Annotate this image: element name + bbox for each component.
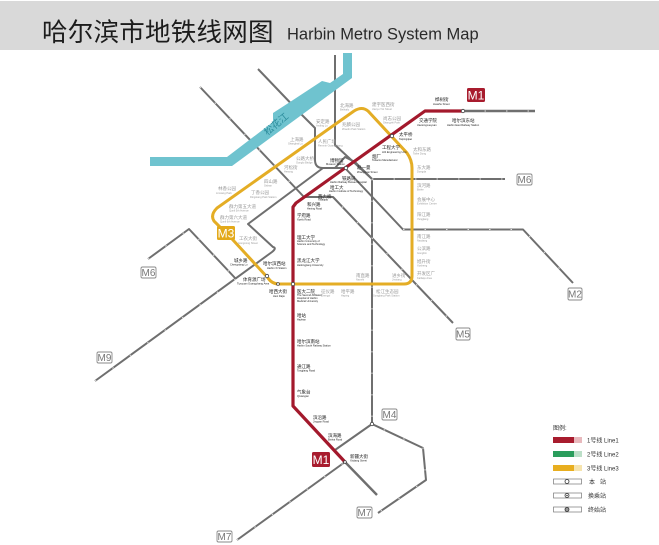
line M4 branch	[335, 424, 372, 450]
station: 旭升街	[417, 258, 431, 265]
station: Binhai Road	[328, 438, 343, 442]
station: 哈工大	[330, 184, 344, 191]
station	[417, 182, 431, 192]
line badge M9: M9	[98, 353, 112, 364]
station: 开发区广	[417, 270, 435, 277]
station: Taipingqiao	[399, 137, 413, 141]
river label: 松花江	[262, 110, 292, 138]
station: Nanzhi	[356, 278, 364, 282]
river: Songhua River	[150, 53, 352, 166]
station: Qixiangtai	[297, 394, 309, 398]
station: Harbin University of	[297, 239, 320, 243]
legend: station: 站	[600, 478, 606, 486]
station	[296, 155, 314, 164]
station	[238, 235, 258, 245]
station: Hazhan	[297, 318, 306, 322]
station: Qunli 6th Avenue	[220, 220, 240, 224]
line badge M2: M2	[568, 290, 582, 300]
station: 松江生态园	[376, 288, 399, 295]
station: 铁路局	[342, 175, 356, 182]
line badge M3: M3	[218, 226, 235, 240]
line 3 yellow	[213, 108, 412, 284]
station	[413, 146, 431, 156]
station: 丁香公园	[251, 189, 269, 196]
station: 公路大桥	[296, 155, 314, 162]
station: 工农大街	[239, 235, 257, 242]
station	[329, 184, 364, 193]
station: 理工大学	[297, 234, 315, 241]
station: 哈尔滨南站	[297, 338, 320, 345]
station	[330, 175, 367, 184]
line 3 station labels	[216, 101, 437, 298]
station: Tongjiang Road	[297, 368, 316, 372]
station: 河松街	[284, 164, 298, 171]
station: 西大桥	[318, 193, 332, 200]
station: Linxiang Park	[216, 191, 232, 195]
station: Qunli 5th Avenue	[229, 208, 249, 212]
station: Science and Technology	[297, 242, 326, 246]
station	[297, 363, 316, 372]
station	[417, 211, 431, 221]
station: 尚志公园	[383, 115, 401, 122]
line badge M1 north: M1	[468, 88, 485, 102]
station: Dongda	[417, 170, 427, 174]
station: 哈站	[297, 312, 306, 319]
station	[318, 138, 343, 148]
station	[297, 338, 331, 348]
line M9	[95, 168, 323, 381]
station	[316, 118, 330, 128]
station: 学府路	[297, 212, 311, 219]
station: Exhibition Center	[417, 202, 437, 206]
station	[237, 276, 270, 286]
legend: line 3: 3号线 Line3	[587, 464, 619, 472]
station: Harbin Institute of Technology	[329, 189, 364, 193]
station: Jingyan Road	[313, 420, 329, 424]
station	[357, 164, 378, 174]
station: Jinxiang	[392, 278, 402, 282]
station: Renmin Guangchang	[318, 144, 343, 148]
station: Chengxiang Lu	[230, 262, 248, 266]
station	[417, 117, 437, 127]
station: 四山路	[264, 178, 278, 185]
station: 南江路	[417, 233, 431, 240]
station: 医大二院	[297, 288, 315, 295]
station: 哈尔滨东站	[452, 117, 475, 124]
station: 会展中心	[417, 196, 435, 203]
station: 城乡路	[234, 257, 248, 264]
station: 和兴路	[307, 201, 321, 208]
station	[417, 233, 431, 242]
title banner	[0, 1, 659, 50]
station	[230, 257, 248, 266]
station: Museum Station	[326, 162, 345, 166]
station	[297, 312, 306, 322]
station ticks on grey lines	[95, 87, 573, 540]
station: 太平桥	[399, 131, 413, 138]
station	[340, 102, 354, 112]
station	[417, 270, 435, 280]
station: 交通学院	[419, 117, 437, 124]
line badge M6 west: M6	[142, 268, 156, 279]
station: Huashu Street	[433, 102, 450, 106]
station	[433, 96, 450, 106]
station: 滨海路	[328, 432, 342, 439]
station	[269, 288, 287, 298]
transfer stations	[265, 109, 465, 463]
station: Shanghai Lu	[288, 142, 303, 146]
station: Kaifaqu Area	[417, 276, 432, 280]
line badge M4: M4	[383, 410, 397, 421]
station: 群力第五大道	[229, 203, 256, 210]
station	[288, 136, 304, 146]
line badge M7 west: M7	[218, 532, 232, 543]
station: 兆麟公园	[342, 121, 360, 128]
station	[417, 196, 437, 206]
station: Zhaolin Park Station	[342, 127, 366, 131]
station: Zhengyi	[321, 294, 331, 298]
station	[229, 203, 256, 212]
station	[297, 212, 311, 222]
station: 南直路	[356, 272, 370, 279]
legend heading: 图例:	[553, 424, 567, 432]
station	[216, 185, 236, 195]
station: Tiyuyuan Guangchang Area	[237, 282, 270, 286]
station: Xidaqiao	[318, 198, 329, 202]
station	[284, 164, 298, 174]
station	[342, 121, 366, 131]
station: Hospital of Harbin	[297, 296, 318, 300]
line badge M7 south: M7	[358, 508, 372, 519]
station: Xuefu Road	[297, 218, 311, 222]
station: 东大路	[417, 164, 431, 171]
station: 黑龙江大学	[297, 257, 320, 264]
legend: line 1: 1号线 Line1	[587, 436, 619, 444]
legend: transfer station: 换乘站	[588, 492, 606, 500]
station	[350, 453, 368, 462]
station: 滨河路	[417, 182, 431, 189]
station: Taihe Dong	[413, 152, 427, 156]
station: Harbin Xi Station	[267, 266, 287, 270]
station: Tobacco Manufacturer	[372, 158, 398, 162]
station	[297, 288, 322, 303]
station: Harbin East Railway Station	[447, 123, 480, 127]
station	[399, 131, 413, 141]
station	[372, 101, 395, 111]
station: 进乡街	[392, 272, 406, 279]
station: 上海路	[290, 136, 304, 143]
station: Anding Lu	[316, 124, 328, 128]
station: 北海路	[340, 102, 354, 109]
station: Hesong	[284, 170, 293, 174]
station: Hexi Dajie	[273, 294, 285, 298]
legend	[553, 424, 619, 514]
station: Jianyu Yixi Street	[372, 107, 392, 111]
station: Xusheng	[417, 264, 428, 268]
station: Heilongjiang University	[297, 263, 324, 267]
station: 建宇医西街	[372, 101, 395, 108]
station: 工程大学	[382, 144, 400, 151]
title: English: Harbin Metro System Map	[287, 26, 479, 44]
station	[307, 201, 323, 210]
station: 安定路	[316, 118, 330, 125]
station	[382, 144, 407, 154]
line badge M1 south: M1	[313, 453, 330, 467]
station: Jiaotongxueyuan	[417, 123, 437, 127]
line badge M6 east: M6	[518, 175, 532, 186]
title: Chinese: 哈尔滨市地铁线网图	[42, 19, 274, 47]
station: Haping	[341, 294, 350, 298]
station: Hrb Engineering Univ	[382, 150, 407, 154]
legend: line 2: 2号线 Line2	[587, 450, 619, 458]
line M2	[323, 168, 573, 283]
station: Shangzhi Park	[383, 120, 401, 124]
station	[417, 258, 431, 268]
station: Songjiang Park Station	[373, 294, 400, 298]
station: 哈平路	[341, 288, 355, 295]
grey planned lines	[95, 55, 573, 540]
station: 新疆大街	[350, 453, 368, 460]
line M6 west	[148, 229, 236, 279]
legend: station	[554, 478, 606, 486]
station	[263, 260, 287, 270]
station: 太和东路	[413, 146, 431, 153]
station	[318, 193, 332, 202]
station	[373, 288, 400, 298]
station	[417, 164, 431, 174]
station	[392, 272, 406, 282]
station: Medical University	[297, 299, 319, 303]
station	[297, 388, 311, 398]
station: 气象台	[297, 388, 311, 396]
station	[321, 288, 335, 298]
station	[297, 234, 326, 246]
station: Nanjiang	[417, 238, 428, 242]
station	[313, 414, 329, 424]
station: Binhe	[417, 188, 424, 192]
station: Zhaoyiman Street	[357, 170, 378, 174]
station	[372, 153, 398, 162]
station: Hexing Road	[307, 206, 323, 210]
station: Gonglu Bridge	[296, 160, 313, 164]
station	[341, 288, 355, 298]
station: 人民广场	[318, 138, 336, 145]
station: Beihailu	[340, 108, 350, 112]
station: 征仪路	[321, 288, 335, 295]
line M6 north-east	[258, 69, 505, 179]
station: 林香公园	[218, 185, 236, 192]
station: 博物馆	[330, 157, 344, 164]
station	[417, 245, 431, 255]
station: Harbin Railway Bureau Hospital	[330, 180, 367, 184]
station: Gongnong Street	[238, 241, 258, 245]
station: Xinjiang Street	[350, 458, 367, 462]
station: 体育源广场	[243, 276, 266, 283]
station: 桦树街	[435, 96, 449, 103]
line M1 extension south	[345, 462, 377, 495]
station: 烟厂	[372, 153, 381, 160]
line M5	[200, 87, 453, 323]
station	[297, 257, 324, 267]
line M4	[335, 55, 426, 513]
station: Gongbin	[417, 251, 427, 255]
station	[220, 214, 247, 224]
legend: station: 本	[589, 478, 595, 486]
station	[356, 272, 370, 282]
line 1 red	[293, 111, 463, 462]
station	[264, 178, 278, 188]
station	[328, 432, 343, 442]
line 1 station labels	[230, 96, 480, 462]
line badge M5: M5	[456, 330, 470, 340]
station: 阳江路	[417, 211, 431, 218]
station: 滨沿路	[313, 414, 327, 421]
station: Harbin South Railway Station	[297, 344, 331, 348]
line M7	[237, 462, 345, 540]
station: 公滨路	[417, 245, 431, 252]
station: Sishan	[264, 184, 272, 188]
station: Yangjiang	[417, 217, 429, 221]
station	[250, 189, 277, 199]
station: 赵一曼	[357, 164, 371, 171]
line M1 extension east	[463, 110, 535, 112]
legend: terminal station: 终始站	[588, 506, 606, 514]
station	[326, 157, 345, 166]
station: 哈尔滨西站	[263, 260, 286, 267]
station: 群力第六大道	[220, 214, 247, 221]
station	[447, 117, 480, 127]
station: 哈西大街	[269, 288, 287, 295]
station	[383, 115, 401, 124]
station: Dingxiang Park Station	[250, 195, 277, 199]
station: The Second Affiliated	[297, 293, 322, 297]
station: 通江路	[297, 363, 311, 370]
